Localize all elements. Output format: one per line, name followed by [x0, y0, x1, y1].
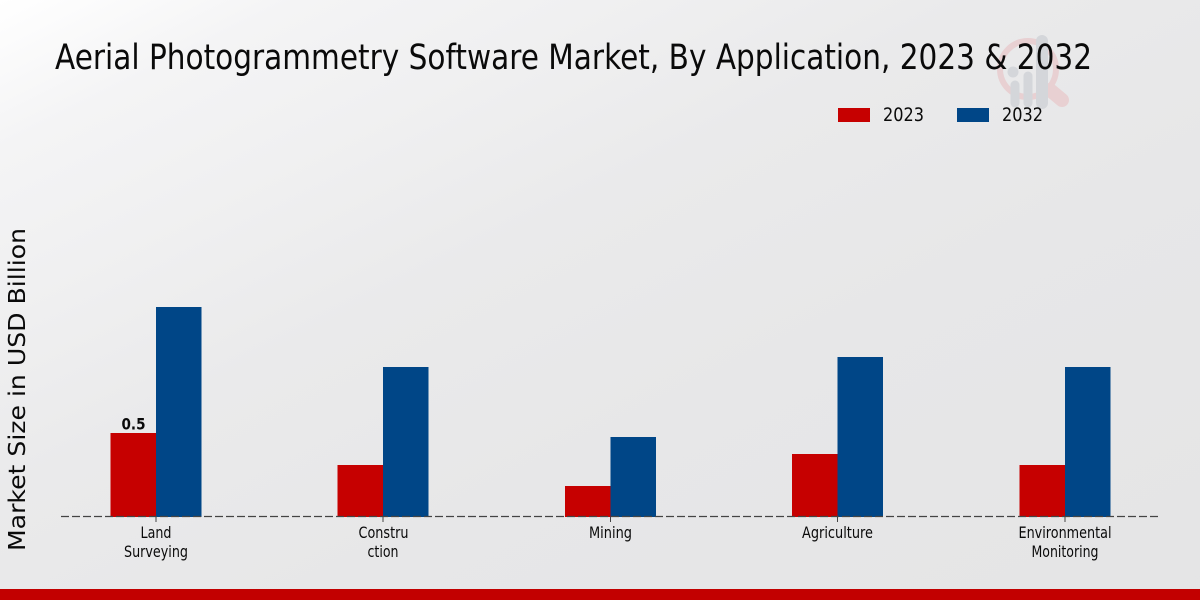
- bar chart: [61, 307, 1159, 522]
- category: Environmental Monitoring: [1018, 523, 1112, 561]
- y-axis title: Market Size in USD Billion: [5, 228, 31, 551]
- legend label: 2023: 2023: [883, 104, 924, 126]
- category: Agriculture: Agriculture: [802, 523, 873, 542]
- x-axis baseline: [61, 516, 1159, 518]
- bars: Construction: [338, 367, 428, 517]
- category: Land Surveying: [124, 523, 188, 561]
- category: Land Surveying: Surveying: [124, 542, 188, 561]
- bars: Agriculture: [792, 357, 883, 517]
- x-axis ticks: [156, 517, 1065, 522]
- category labels: [124, 523, 1112, 561]
- legend swatch: 2023: [838, 108, 870, 122]
- footer bar: [0, 589, 1200, 600]
- category: Construction: ction: [368, 542, 398, 561]
- bars: Mining: [565, 437, 656, 517]
- category: Environmental Monitoring: Environmental: [1018, 523, 1112, 542]
- category: Land Surveying: Land: [140, 523, 172, 542]
- category: Mining: Mining: [589, 523, 632, 542]
- category: Construction: Constru: [358, 523, 408, 542]
- legend swatch: 2032: [957, 108, 989, 122]
- data label: 0.5: 0.5: [122, 414, 146, 434]
- icon: watermark logo: [1000, 41, 1062, 103]
- legend: [838, 104, 1043, 126]
- category: Construction: [358, 523, 408, 561]
- bars: Land Surveying: [110, 307, 202, 517]
- bars: Environmental Monitoring: [1020, 367, 1110, 517]
- category: Environmental Monitoring: Monitoring: [1032, 542, 1098, 561]
- legend label: 2032: 2032: [1002, 104, 1043, 126]
